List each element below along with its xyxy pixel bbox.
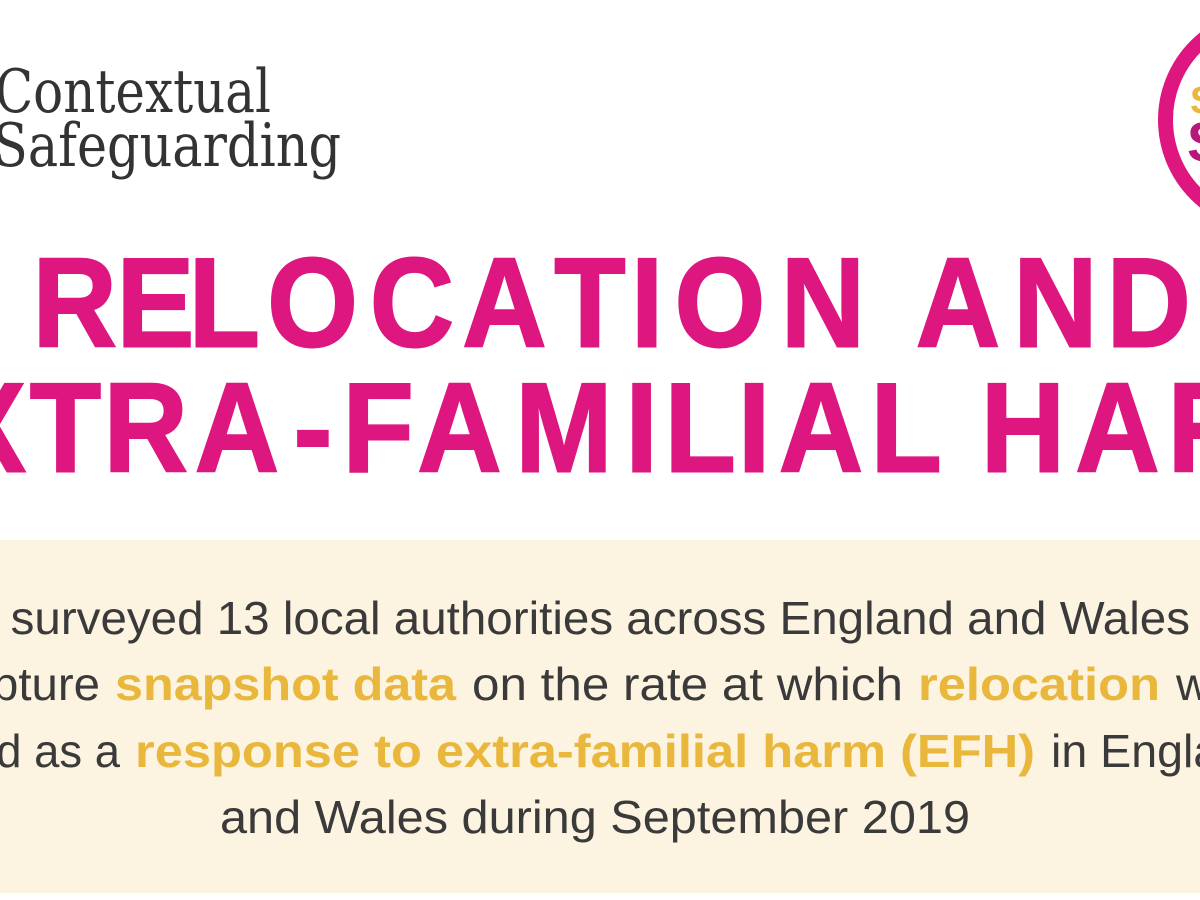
text block: survey description <box>0 592 1200 843</box>
title <box>0 232 1200 499</box>
logo: circular badge <box>1166 16 1200 224</box>
text block: survey description: snapshot data <box>115 658 456 710</box>
logo: Contextual Safeguarding <box>0 57 341 181</box>
logo: Contextual Safeguarding: Safeguarding <box>0 111 341 181</box>
text block: survey description: response to extra-familial harm (EFH) <box>135 725 1035 777</box>
title: RELOCATION AND <box>32 232 1191 374</box>
logo: Contextual Safeguarding: Contextual <box>0 57 271 127</box>
text block: survey description: relocation <box>918 658 1160 710</box>
text block: survey description: and Wales during September 2019 <box>220 791 970 843</box>
panel: survey summary <box>0 540 1200 893</box>
text block: survey description: on the rate at which <box>472 658 903 710</box>
